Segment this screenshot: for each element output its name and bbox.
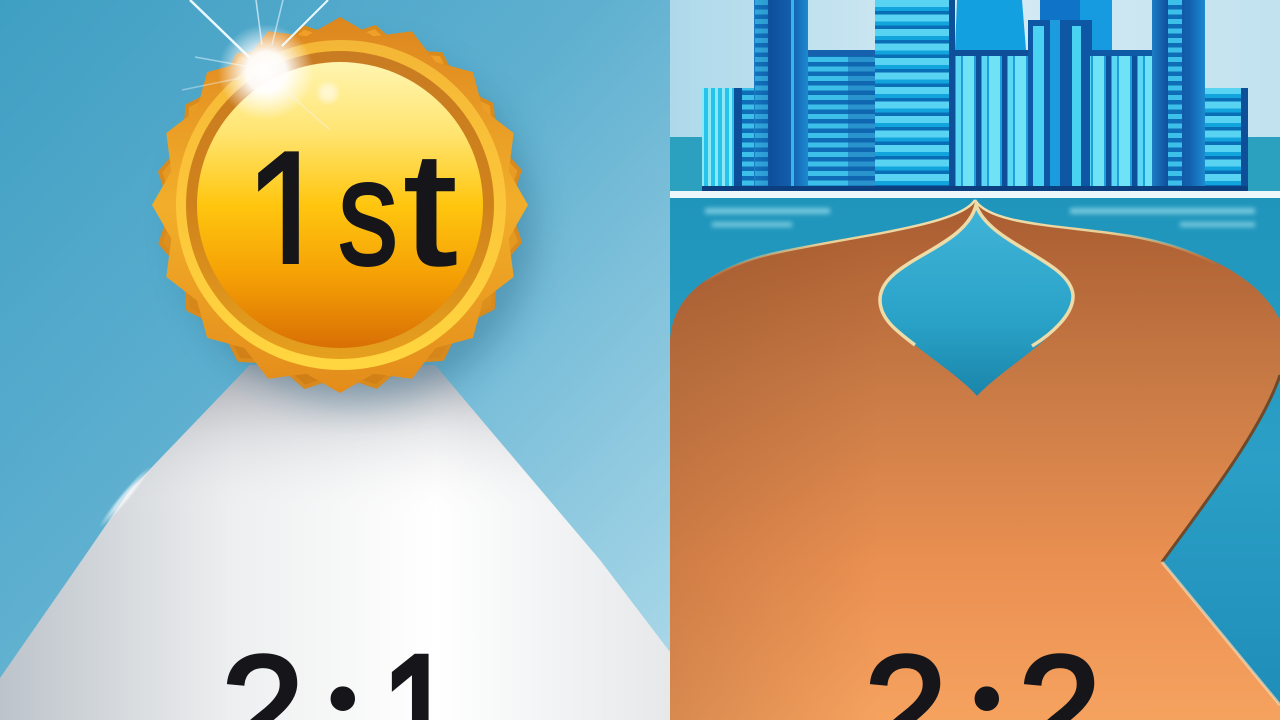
shoreline — [670, 191, 1280, 198]
medal label: 1 — [244, 112, 332, 322]
horizon water — [670, 137, 1280, 192]
ratio label: 2:1 — [226, 653, 429, 720]
ratio label: 2:2 — [864, 599, 1101, 720]
water ripples — [705, 208, 1255, 227]
medal gold disc — [197, 62, 483, 348]
sky — [670, 0, 1280, 165]
medal front scallops — [152, 17, 528, 393]
white pyramid — [0, 365, 670, 720]
road — [670, 200, 1280, 720]
medal back scallops — [158, 25, 522, 389]
city skyline — [702, 0, 1248, 191]
road fork gap — [880, 205, 1073, 396]
medal shadow — [182, 52, 534, 404]
medal label: s — [338, 128, 398, 296]
sparkle — [95, 0, 341, 531]
panel background — [0, 0, 670, 720]
medal label: t — [404, 119, 456, 298]
medal outer ring — [176, 40, 506, 370]
medal: 1st — [152, 17, 528, 393]
medal label — [258, 151, 456, 267]
panel: right city and road — [670, 0, 1280, 720]
panel: left achievement — [0, 0, 670, 720]
river — [670, 198, 1280, 720]
